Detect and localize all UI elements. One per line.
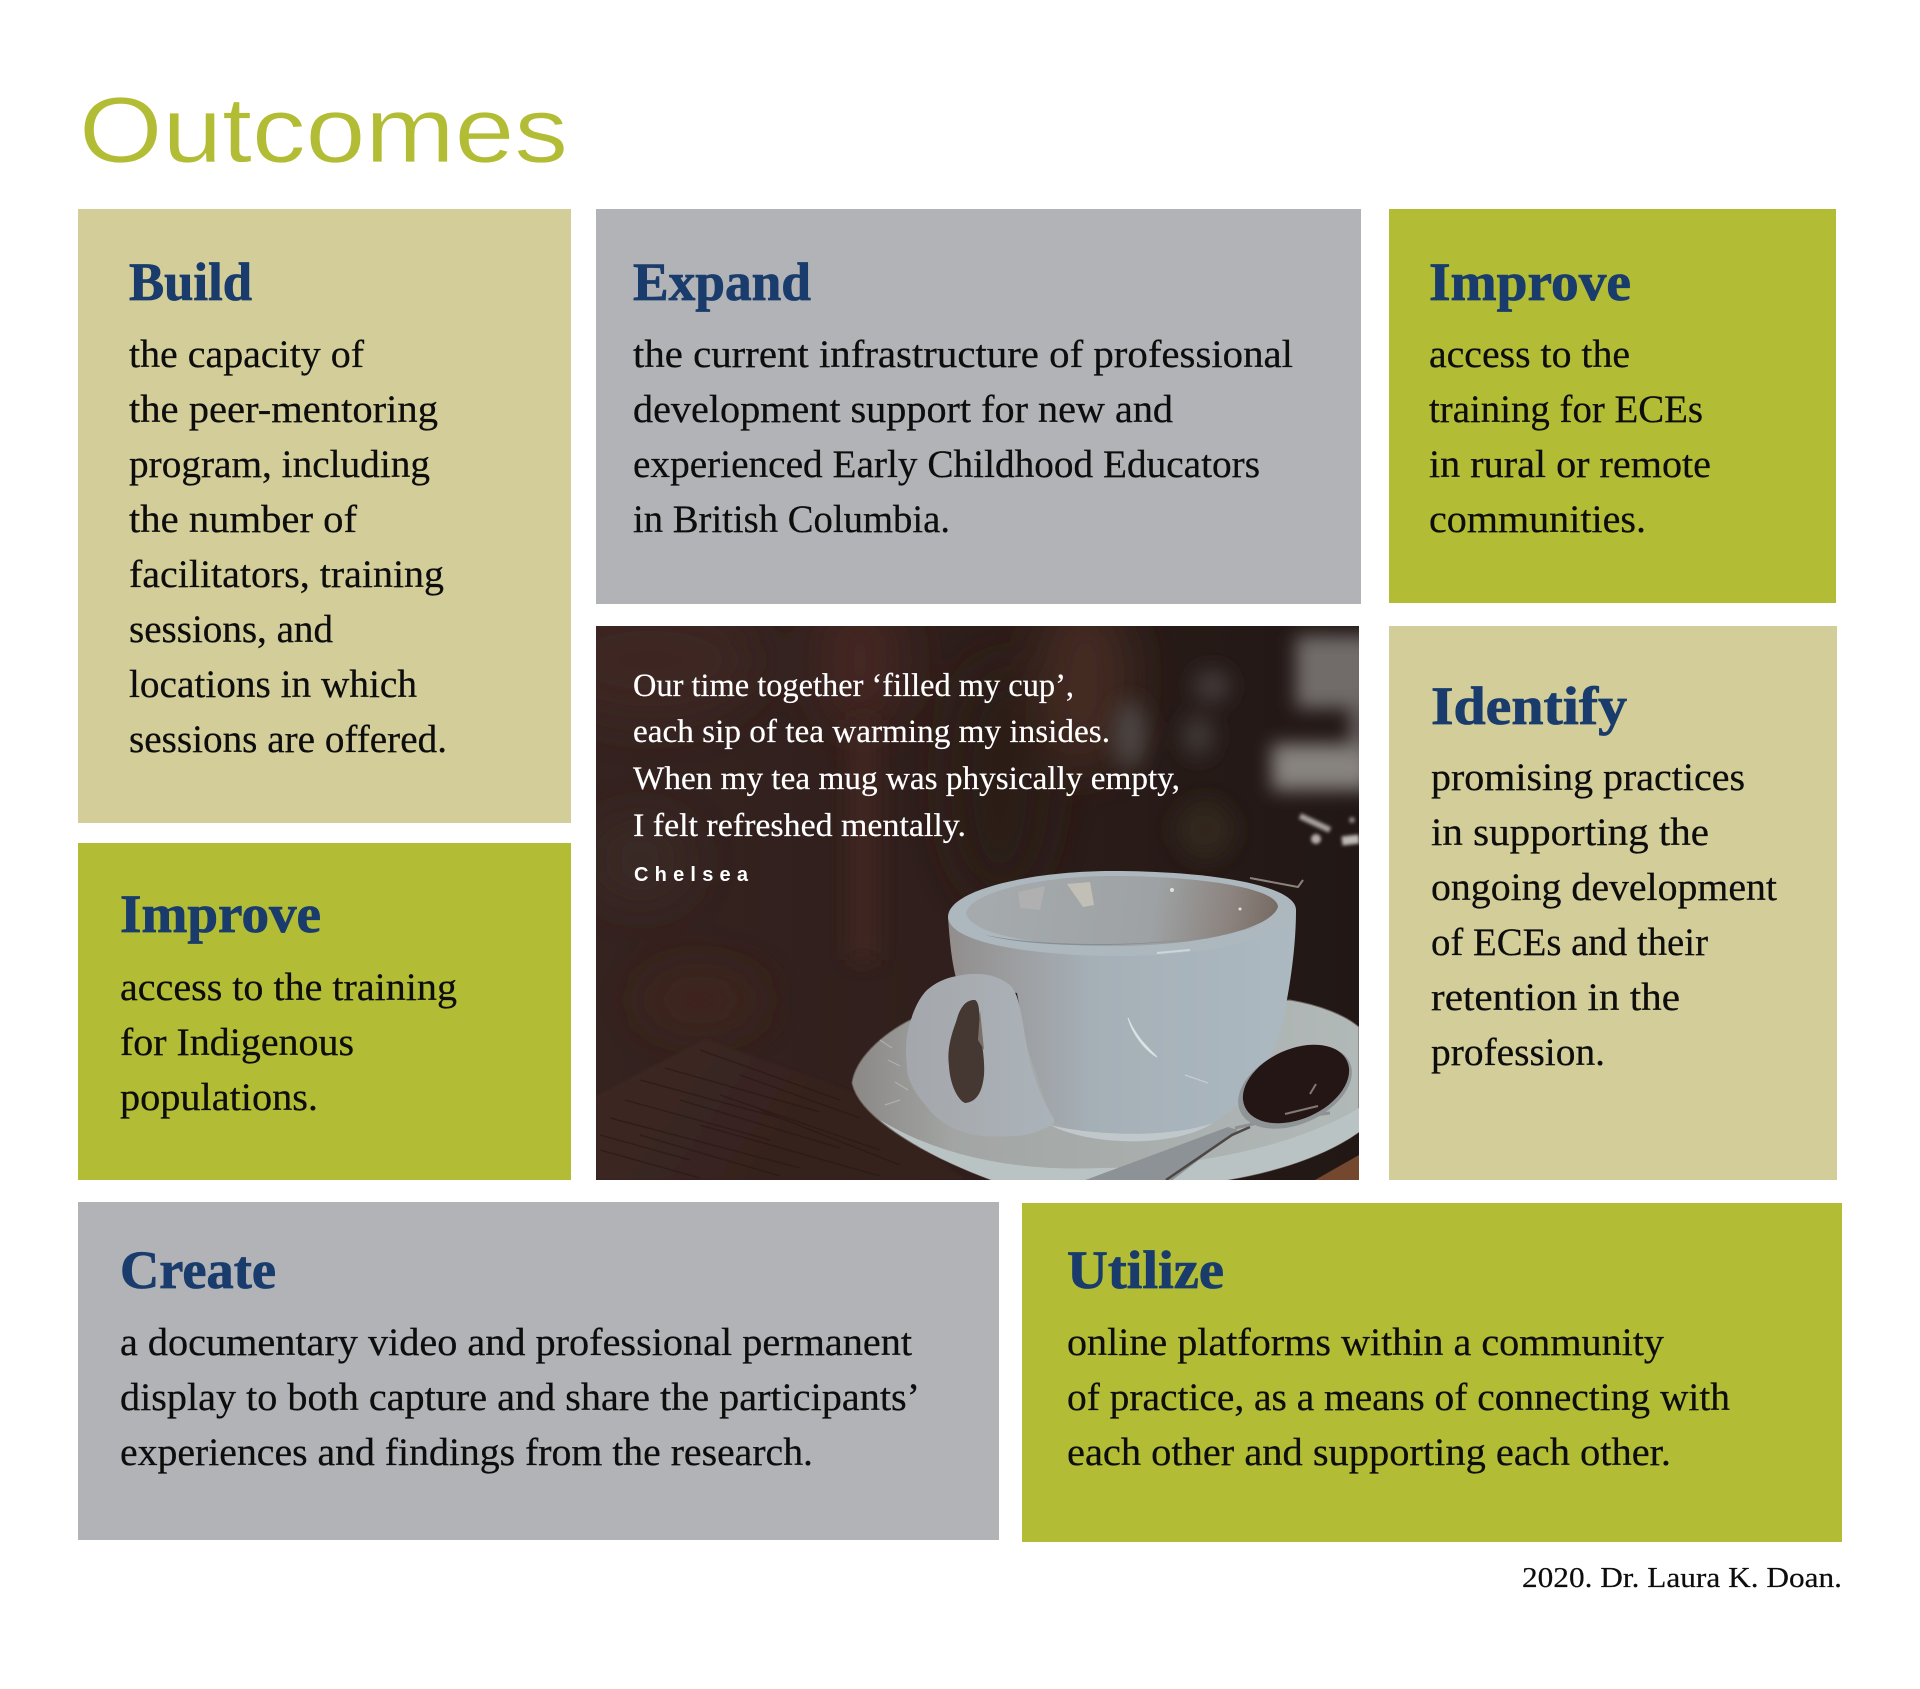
text: build description xyxy=(129,333,447,761)
panel: photo quote xyxy=(596,626,1359,1180)
panel: improve indigenous access xyxy=(78,843,571,1180)
text: improve rural description: access to the xyxy=(1429,333,1630,376)
text: utilize description: each other and supporting each other. xyxy=(1067,1431,1671,1474)
text: identify description: retention in the xyxy=(1431,976,1680,1019)
text: create description: display to both capture and share the participants’ xyxy=(120,1376,920,1419)
text: build description: sessions, and xyxy=(129,608,333,651)
text: build description: locations in which xyxy=(129,663,417,706)
heading: utilize: Utilize xyxy=(1067,1240,1224,1300)
panel: expand xyxy=(596,209,1361,604)
text: build description: the number of xyxy=(129,498,357,541)
text: identify description: in supporting the xyxy=(1431,811,1709,854)
text: utilize description xyxy=(1067,1321,1730,1474)
text: create description: a documentary video and professional permanent xyxy=(120,1321,912,1364)
panel: create xyxy=(78,1202,999,1540)
text: improve description: access to the training xyxy=(120,966,457,1009)
text: identify description: ongoing development xyxy=(1431,866,1777,909)
text: utilize description: online platforms within a community xyxy=(1067,1321,1665,1364)
text: build description: the capacity of xyxy=(129,333,364,376)
text: improve description: for Indigenous xyxy=(120,1021,354,1064)
photo: spoon xyxy=(1086,1044,1352,1180)
panel: utilize xyxy=(1022,1203,1842,1542)
text: improve rural description xyxy=(1429,333,1711,541)
photo: cup handle xyxy=(906,974,1054,1137)
heading: expand: Expand xyxy=(633,252,811,312)
text: build description: the peer-mentoring xyxy=(129,388,438,431)
text: create description xyxy=(120,1321,920,1474)
photo: cup body xyxy=(948,871,1296,1142)
text: expand description: development support for new and xyxy=(633,388,1174,431)
heading: identify: Identify xyxy=(1431,676,1627,736)
photo: saucer xyxy=(852,1000,1359,1182)
heading: create: Create xyxy=(120,1240,276,1300)
text: utilize description: of practice, as a means of connecting with xyxy=(1067,1376,1730,1419)
title: Outcomes xyxy=(79,78,568,182)
heading: improve: Improve xyxy=(120,884,321,944)
quote attribution: Chelsea xyxy=(634,864,749,886)
quote text: each sip of tea warming my insides. xyxy=(633,714,1110,750)
text: expand description xyxy=(633,333,1293,541)
quote text xyxy=(633,668,1180,886)
text: improve description: populations. xyxy=(120,1076,318,1119)
text: identify description: promising practices xyxy=(1431,756,1745,799)
text: improve rural description: communities. xyxy=(1429,498,1646,541)
text: build description: sessions are offered. xyxy=(129,718,447,761)
credit line: 2020. Dr. Laura K. Doan. xyxy=(1522,1562,1842,1594)
photo: wooden table xyxy=(596,1039,1359,1180)
photo: cup interior xyxy=(966,876,1278,946)
panel: improve rural access xyxy=(1389,209,1836,603)
text: identify description: of ECEs and their xyxy=(1431,921,1708,964)
heading: build: Build xyxy=(129,252,252,312)
heading: improve: Improve xyxy=(1429,252,1631,312)
text: expand description: experienced Early Childhood Educators xyxy=(633,443,1260,486)
text: identify description: profession. xyxy=(1431,1031,1605,1074)
quote text: When my tea mug was physically empty, xyxy=(633,761,1180,797)
panel: identify xyxy=(1389,626,1837,1180)
quote text: I felt refreshed mentally. xyxy=(633,808,966,844)
text: build description: program, including xyxy=(129,443,430,486)
panel: build xyxy=(78,209,571,823)
text: expand description: the current infrastructure of professional xyxy=(633,333,1293,376)
text: create description: experiences and findings from the research. xyxy=(120,1431,813,1474)
quote text: Our time together ‘filled my cup’, xyxy=(633,668,1074,704)
text: improve rural description: training for ECEs xyxy=(1429,388,1703,431)
text: identify description xyxy=(1431,756,1777,1074)
text: improve rural description: in rural or remote xyxy=(1429,443,1711,486)
photo: blurred background xyxy=(596,626,1359,1020)
text: build description: facilitators, training xyxy=(129,553,444,596)
text: improve description xyxy=(120,966,457,1119)
text: expand description: in British Columbia. xyxy=(633,498,950,541)
